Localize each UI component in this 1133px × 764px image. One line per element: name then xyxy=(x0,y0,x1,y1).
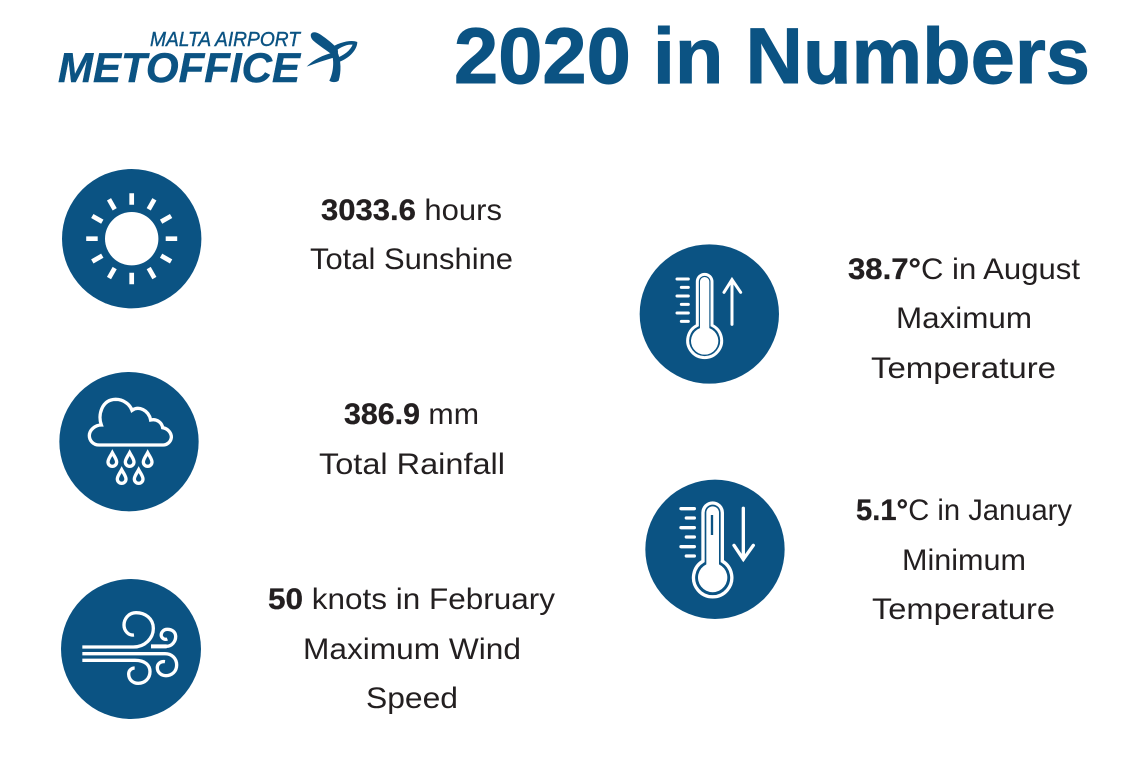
title: 2020 in Numbers xyxy=(454,11,1090,100)
text: maximum temperature: 38.7°C in August xyxy=(848,253,1081,286)
text: maximum temperature: Temperature xyxy=(871,352,1056,385)
icon: thermometer with down arrow xyxy=(645,480,785,619)
logo: Malta Airport Met Office: MALTA AIRPORT xyxy=(150,29,302,51)
text: maximum wind speed xyxy=(268,583,555,715)
text: maximum temperature: Maximum xyxy=(896,302,1032,335)
text: maximum wind speed: Speed xyxy=(366,682,458,715)
text: minimum temperature: Minimum xyxy=(902,544,1026,577)
text: maximum temperature xyxy=(848,253,1081,385)
icon: thermometer with up arrow xyxy=(640,244,779,384)
text: total sunshine: Total Sunshine xyxy=(310,243,513,276)
text: maximum wind speed: 50 knots in February xyxy=(268,583,555,616)
icon: rain cloud xyxy=(59,372,199,511)
text: total rainfall xyxy=(319,398,505,481)
logo: Malta Airport Met Office: METOFFICE xyxy=(58,44,302,91)
text: minimum temperature xyxy=(856,494,1072,626)
text: minimum temperature: Temperature xyxy=(872,593,1055,626)
text: total rainfall: Total Rainfall xyxy=(319,448,505,481)
text: total sunshine xyxy=(310,194,513,276)
text: total rainfall: 386.9 mm xyxy=(344,398,479,431)
text: total sunshine: 3033.6 hours xyxy=(321,194,502,227)
text: minimum temperature: 5.1°C in January xyxy=(856,494,1072,527)
icon: wind xyxy=(61,579,201,719)
logo: Malta Airport Met Office xyxy=(58,29,357,91)
icon: sun xyxy=(62,169,201,308)
text: maximum wind speed: Maximum Wind xyxy=(303,633,521,666)
